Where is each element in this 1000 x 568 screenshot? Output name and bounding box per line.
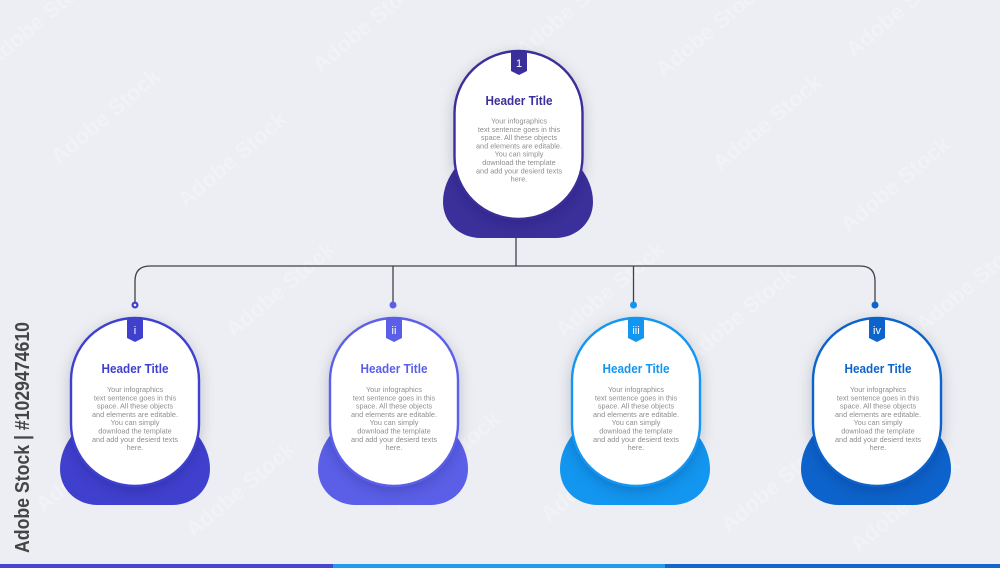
- connector dot: iv: [872, 302, 878, 308]
- panel: top card 1: text sentence goes in this: [478, 125, 561, 134]
- panel: card ii: ii: [392, 325, 396, 337]
- connector dot: iii: [630, 302, 637, 308]
- panel: card ii: space. All these objects: [356, 402, 432, 411]
- panel: card i: You can simply: [111, 418, 160, 427]
- text: Adobe Stock: [836, 131, 955, 237]
- panel: card iii: download the template: [599, 426, 673, 436]
- panel: card iii: Your infographics: [608, 385, 664, 394]
- panel: card iii: here.: [628, 443, 644, 452]
- panel: card iv: download the template: [841, 426, 915, 436]
- text: Adobe Stock: [181, 436, 300, 542]
- panel: top card 1: 1: [516, 58, 522, 70]
- panel: card i: text sentence goes in this: [94, 393, 177, 402]
- panel: card iii: iii: [632, 325, 640, 337]
- panel: card iv: Your infographics: [850, 385, 906, 394]
- panel: card iv: text sentence goes in this: [837, 393, 920, 402]
- stock id side label: Adobe Stock | #1029474610: [12, 322, 34, 553]
- panel: card i: and elements are editable.: [92, 410, 178, 419]
- connector lines: [135, 238, 875, 303]
- text: Adobe Stock: [551, 236, 670, 342]
- text: Adobe Stock: [386, 406, 505, 512]
- connector dot: i: [132, 302, 138, 308]
- panel: card ii: here.: [386, 443, 402, 452]
- panel: card iv: here.: [870, 443, 886, 452]
- panel: top card 1: Your infographics: [491, 116, 547, 126]
- text: Adobe Stock: [716, 431, 835, 537]
- panel: top card 1: space. All these objects: [481, 133, 557, 142]
- panel: card ii: Header Title: [360, 362, 428, 376]
- text: Adobe Stock: [173, 106, 292, 212]
- text: Adobe Stock: [441, 81, 560, 187]
- panel: card ii: text sentence goes in this: [353, 393, 436, 402]
- panel: card ii: [318, 318, 468, 505]
- bottom colour bar: [0, 564, 1000, 568]
- panel: card iv: and elements are editable.: [835, 410, 921, 419]
- panel: card i: here.: [127, 443, 143, 452]
- panel: card iii: text sentence goes in this: [595, 393, 678, 402]
- panel: card iv: Header Title: [844, 362, 912, 376]
- panel: card ii: You can simply: [370, 418, 419, 427]
- text: Adobe Stock: [46, 63, 165, 169]
- text: Adobe Stock: [708, 69, 827, 175]
- panel: card iii: space. All these objects: [598, 402, 674, 411]
- panel: card iv: and add your desierd texts: [835, 435, 921, 444]
- panel: card i: i: [134, 325, 136, 337]
- panel: card i: Header Title: [102, 362, 169, 376]
- panel: card iii: and elements are editable.: [593, 410, 679, 419]
- text: Adobe Stock: [31, 411, 150, 517]
- panel: card i: download the template: [98, 426, 172, 436]
- text: Adobe Stock: [846, 451, 965, 557]
- connector dot: ii: [390, 302, 396, 308]
- panel: card iii: and add your desierd texts: [593, 435, 679, 444]
- panel: top card 1: here.: [511, 175, 527, 184]
- panel: top card 1: Header Title: [486, 94, 553, 108]
- text: Adobe Stock: [221, 236, 340, 342]
- panel: top card 1: and elements are editable.: [476, 141, 562, 150]
- text: Adobe Stock: [536, 421, 655, 527]
- panel: card i: space. All these objects: [97, 402, 173, 411]
- panel: card iv: iv: [873, 325, 881, 337]
- panel: card iv: [801, 318, 951, 505]
- panel: card i: and add your desierd texts: [92, 435, 178, 444]
- panel: top card 1: and add your desierd texts: [476, 166, 562, 175]
- panel: card iii: Header Title: [602, 362, 670, 376]
- panel: top card 1: download the template: [482, 158, 556, 167]
- panel: card iii: You can simply: [612, 418, 661, 427]
- panel: card i: Your infographics: [107, 385, 163, 394]
- panel: card ii: and elements are editable.: [351, 410, 437, 419]
- panel: card ii: Your infographics: [366, 385, 422, 394]
- panel: card ii: download the template: [357, 426, 431, 436]
- panel: card iii: [560, 318, 710, 505]
- panel: card iv: You can simply: [854, 418, 903, 427]
- panel: top card 1: [443, 51, 593, 238]
- panel: top card 1: You can simply: [495, 150, 544, 159]
- panel: card ii: and add your desierd texts: [351, 435, 437, 444]
- panel: card i: [60, 318, 210, 505]
- text: Adobe Stock: [681, 261, 800, 367]
- panel: card iv: space. All these objects: [840, 402, 916, 411]
